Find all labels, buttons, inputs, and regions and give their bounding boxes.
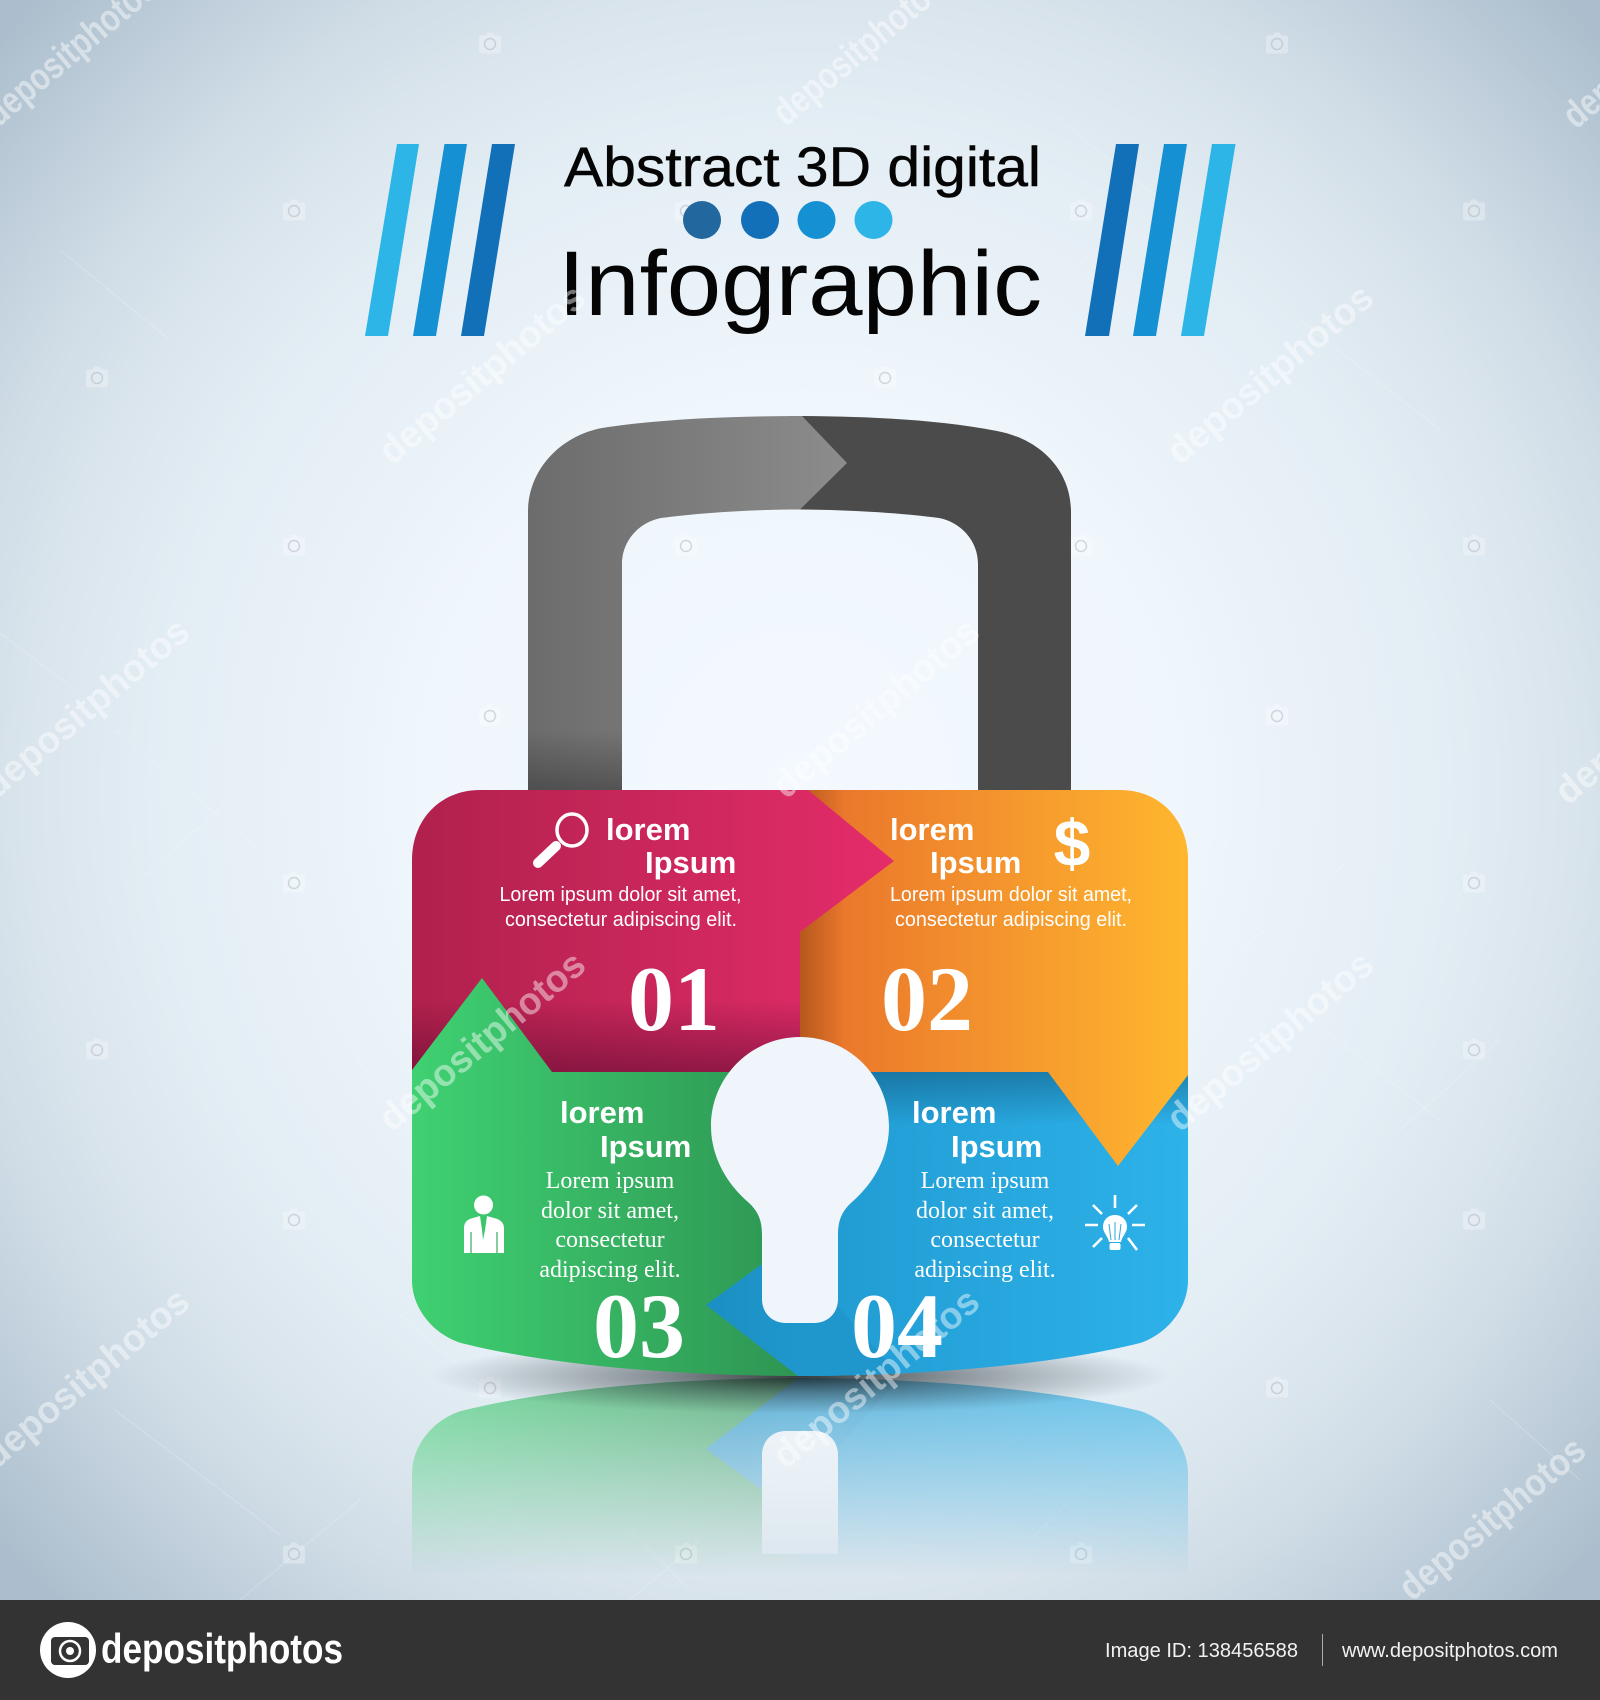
heading 01: lorem — [606, 812, 690, 847]
lock body — [412, 790, 1188, 1376]
footer logo icon — [40, 1622, 96, 1678]
blue arrow — [706, 1264, 900, 1376]
heading 03: Ipsum — [600, 1129, 691, 1164]
panel 01: pink — [412, 790, 894, 1072]
watermark camera icons — [86, 32, 1485, 1564]
body text 03: dolor sit amet, — [541, 1198, 679, 1224]
body text 04: consectetur — [930, 1227, 1040, 1253]
block 03 content — [464, 1095, 691, 1377]
body text 01 — [500, 884, 742, 931]
panel 04: blue — [798, 1072, 1188, 1376]
heading 03 — [560, 1095, 691, 1164]
shackle left arrow segment — [528, 416, 847, 790]
heading 03: lorem — [560, 1095, 644, 1130]
footer logo wordmark: depositphotos — [101, 1625, 343, 1672]
watermark text: depositphotos — [371, 943, 594, 1140]
heading 02: lorem — [890, 812, 974, 847]
body text 03: adipiscing elit. — [539, 1257, 681, 1283]
right stripes — [1085, 144, 1236, 336]
number 02: 02 — [881, 948, 973, 1050]
title line 1: Abstract 3D digital — [564, 135, 1041, 198]
heading 04 — [912, 1095, 1042, 1164]
heading 02 — [890, 812, 1021, 880]
watermark text: depositphotos — [371, 276, 594, 473]
keyhole — [711, 1037, 889, 1323]
body text 02: Lorem ipsum dolor sit amet, — [890, 884, 1132, 906]
website: www.depositphotos.com — [1341, 1640, 1558, 1662]
body text 02: consectetur adipiscing elit. — [895, 909, 1127, 931]
title block — [365, 135, 1236, 336]
number 01: 01 — [628, 948, 720, 1050]
heading 01: Ipsum — [645, 845, 736, 880]
body text 01: Lorem ipsum dolor sit amet, — [500, 884, 742, 906]
icon: magnifier — [538, 814, 587, 863]
icon: light bulb — [1085, 1195, 1145, 1250]
padlock — [412, 416, 1188, 1376]
number 04: 04 — [851, 1275, 943, 1377]
watermark text: depositphotos — [1159, 276, 1382, 473]
icon: person — [464, 1196, 504, 1253]
body text 02 — [890, 884, 1132, 931]
watermark text: depositphotos — [765, 610, 988, 807]
reflection of the lock — [412, 1378, 1188, 1563]
heading 04: lorem — [912, 1095, 996, 1130]
heading 01 — [606, 812, 736, 880]
shackle right dark segment — [790, 416, 1071, 790]
body text 04: adipiscing elit. — [914, 1257, 1056, 1283]
heading 02: Ipsum — [930, 845, 1021, 880]
title line 2: Infographic — [558, 233, 1042, 335]
body text 03 — [539, 1168, 681, 1283]
floor shadow — [430, 1338, 1170, 1414]
body text 04 — [914, 1168, 1056, 1283]
panel 03: green — [412, 978, 800, 1376]
shackle — [528, 416, 1071, 790]
title dots — [683, 201, 892, 239]
body text 03: consectetur — [555, 1227, 665, 1253]
panel 02: orange — [790, 790, 1188, 1166]
image id: Image ID: 138456588 — [1105, 1640, 1298, 1662]
number 03: 03 — [593, 1275, 685, 1377]
block 01 content — [500, 812, 742, 1050]
block 04 content — [851, 1095, 1145, 1377]
body text 04: dolor sit amet, — [916, 1198, 1054, 1224]
block 02 content — [881, 806, 1132, 1050]
left stripes — [365, 144, 515, 336]
watermark text: depositphotos — [1159, 943, 1382, 1140]
icon: dollar: $ — [1054, 806, 1090, 880]
footer bar — [0, 1600, 1600, 1700]
watermark text: depositphotos — [765, 1280, 988, 1477]
body text 01: consectetur adipiscing elit. — [505, 909, 737, 931]
body text 03: Lorem ipsum — [546, 1168, 675, 1194]
body text 04: Lorem ipsum — [921, 1168, 1050, 1194]
heading 04: Ipsum — [951, 1129, 1042, 1164]
